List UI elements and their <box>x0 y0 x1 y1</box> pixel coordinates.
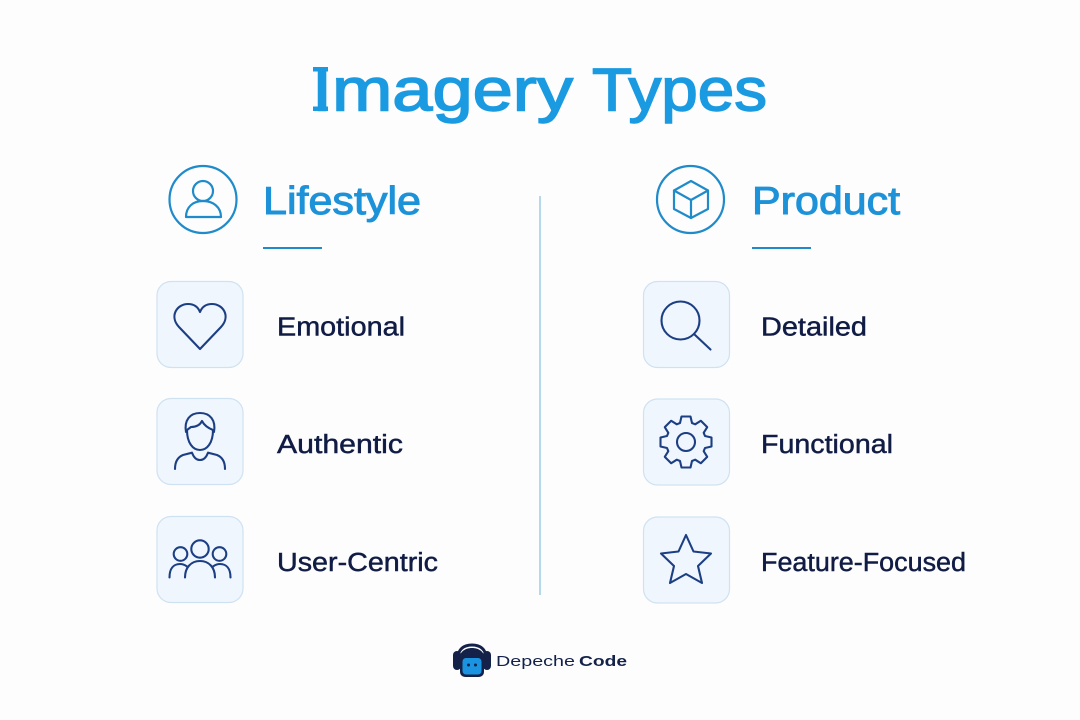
item: user-centric: User-Centric <box>277 549 438 577</box>
logo: depeche code: Depeche <box>496 653 575 670</box>
title: Imagery <box>312 56 573 124</box>
icon: product cube in circle <box>657 166 724 233</box>
logo: depeche code: Code <box>579 653 627 670</box>
item: user-centric <box>157 516 438 602</box>
icon: robot with headphones <box>453 645 491 677</box>
heading: lifestyle: Lifestyle <box>263 180 421 223</box>
item: functional <box>644 399 893 485</box>
title: Types <box>592 56 767 124</box>
logo: depeche code <box>453 645 627 677</box>
icon: lifestyle person in circle <box>170 166 236 233</box>
panel: lifestyle <box>157 166 438 602</box>
item: detailed <box>644 282 867 368</box>
item: authentic: Authentic <box>277 431 403 459</box>
icon: star <box>661 535 711 583</box>
icon: group of people <box>170 540 230 578</box>
item: emotional <box>157 282 405 368</box>
icon: gear <box>660 416 712 468</box>
item: detailed: Detailed <box>761 314 867 342</box>
heading: product: Product <box>752 180 900 223</box>
icon: magnifier <box>662 302 710 350</box>
icon: man <box>175 413 225 469</box>
item: functional: Functional <box>761 431 893 459</box>
title <box>312 56 767 124</box>
item: feature-focused: Feature-Focused <box>761 549 966 577</box>
item: feature-focused <box>644 517 966 603</box>
panel: product <box>644 166 966 603</box>
item: emotional: Emotional <box>277 314 405 342</box>
item: authentic <box>157 398 403 484</box>
icon: heart <box>174 304 226 349</box>
